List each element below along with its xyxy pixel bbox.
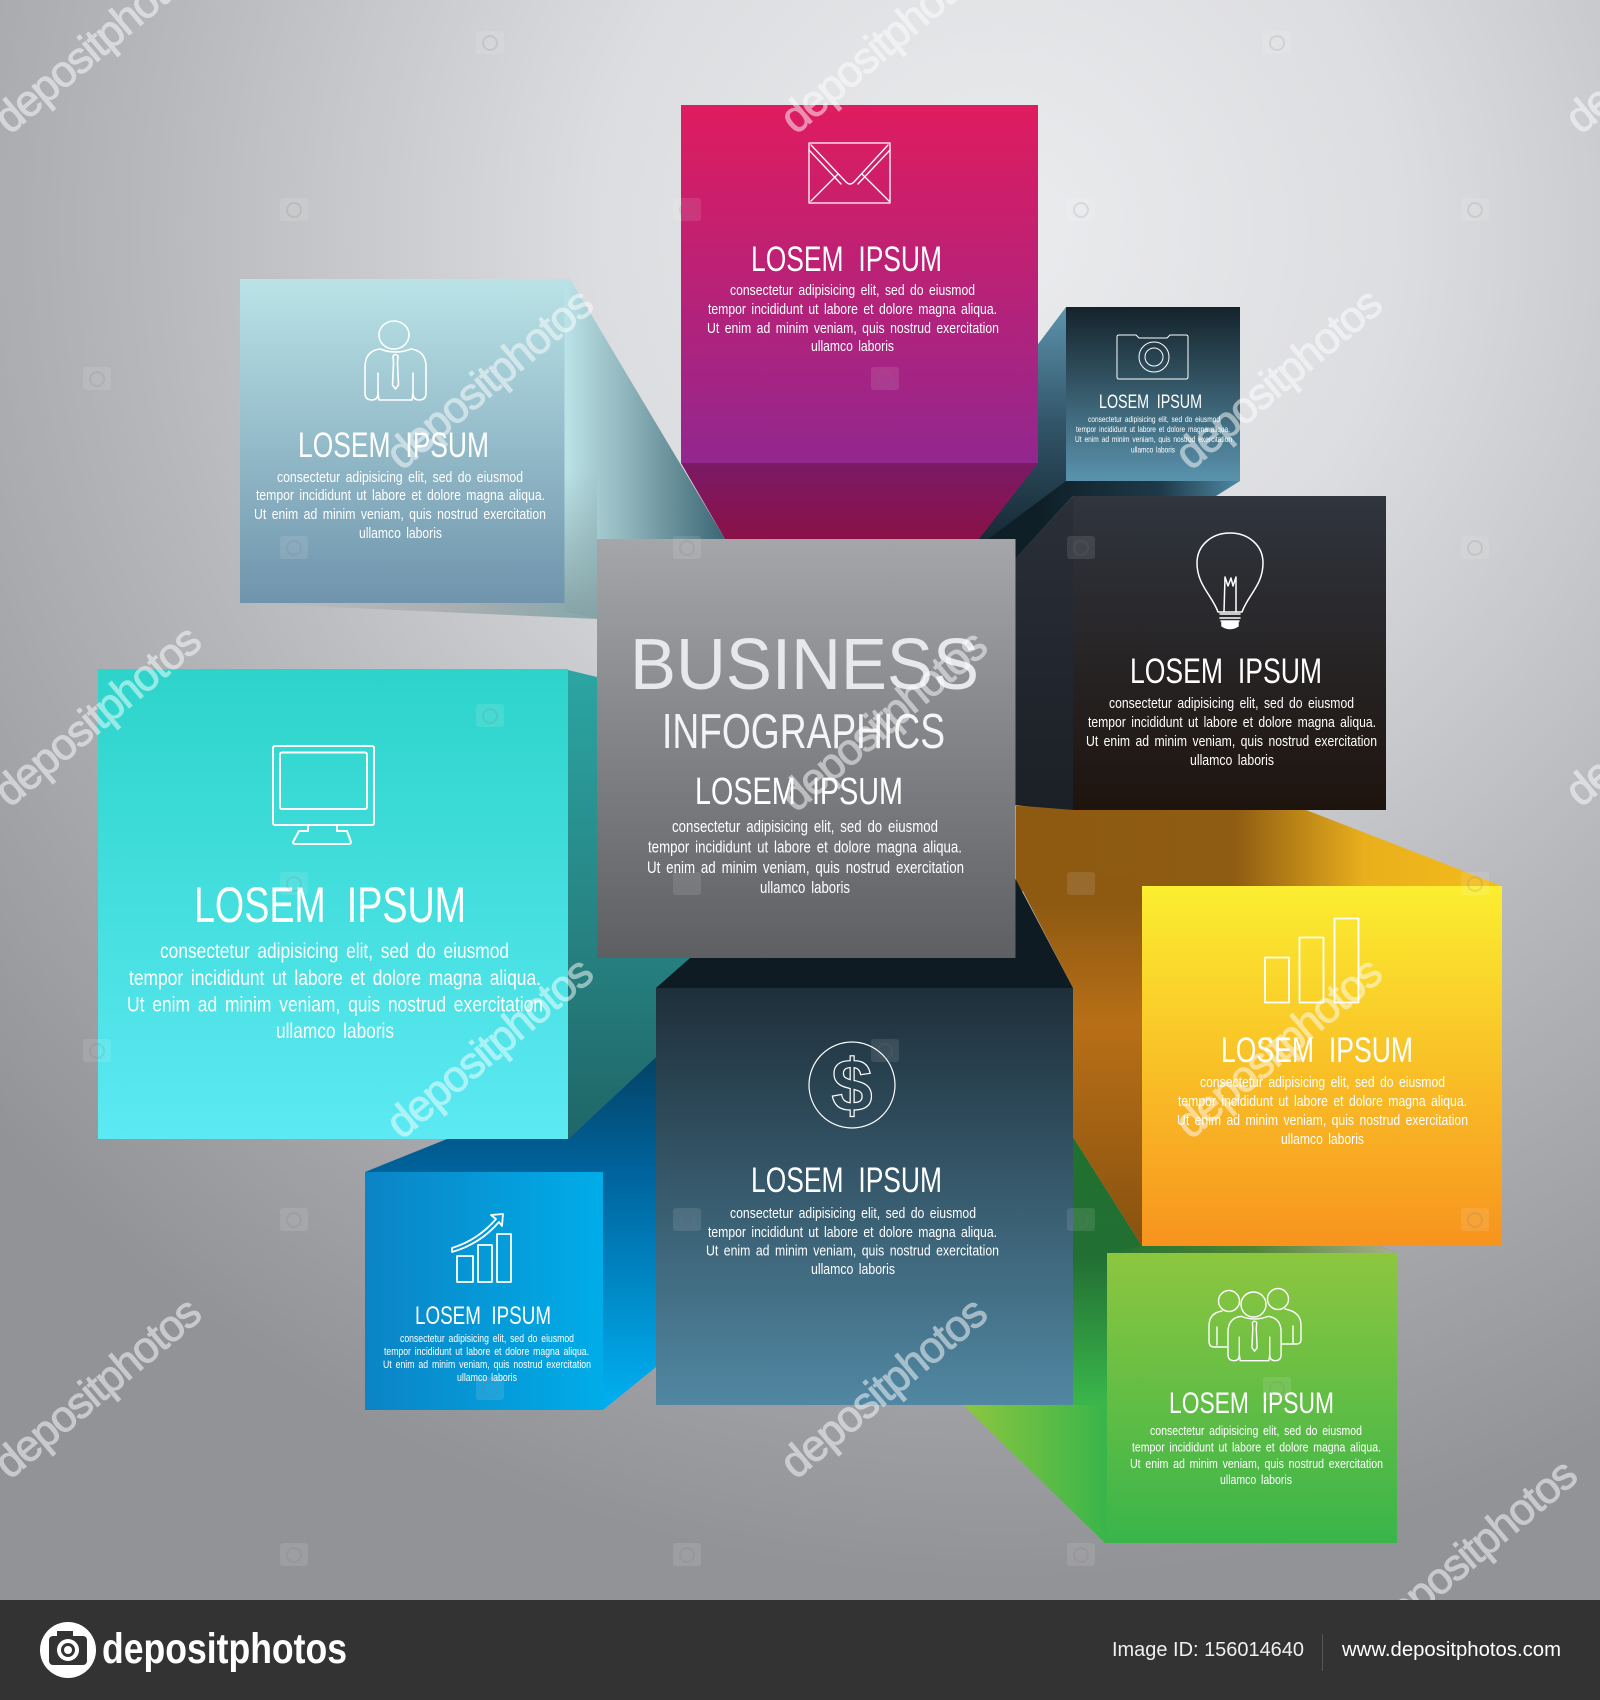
watermark text repeated: depositphotos xyxy=(771,1287,997,1488)
text block: lamp cube: Ut enim ad minim veniam, quis nostrud exercitation xyxy=(1086,733,1377,750)
text block: green cube: Ut enim ad minim veniam, quis nostrud exercitation xyxy=(1130,1456,1383,1471)
text block: slate cube: tempor incididunt ut labore et dolore magna aliqua. xyxy=(708,1224,997,1241)
panel: slate cube xyxy=(656,878,1073,1405)
text block: slate cube: Ut enim ad minim veniam, quis nostrud exercitation xyxy=(706,1242,999,1260)
lamp cube front face xyxy=(1073,496,1386,810)
panel: pale blue cube front xyxy=(240,279,564,603)
heading: center cube: LOSEM IPSUM xyxy=(695,771,903,813)
text block: yellow cube: tempor incididunt ut labore et dolore magna aliqua. xyxy=(1178,1093,1467,1110)
footer bar xyxy=(0,1600,1600,1700)
panel: center grey cube xyxy=(597,539,1016,958)
footer brand name: depositphotos xyxy=(102,1625,347,1673)
text block: pale blue: ullamco laboris xyxy=(359,525,442,542)
text block: pale blue xyxy=(254,469,546,542)
icon: dollar coin: $ xyxy=(831,1044,873,1127)
text block: lamp cube: tempor incididunt ut labore et dolore magna aliqua. xyxy=(1088,714,1376,731)
heading: camera cube: LOSEM IPSUM xyxy=(1099,392,1202,413)
text block: green cube xyxy=(1130,1423,1383,1487)
text block: blue cube: Ut enim ad minim veniam, quis nostrud exercitation xyxy=(383,1359,591,1371)
panel: blue cube front xyxy=(365,1172,603,1410)
icon: camera xyxy=(1117,335,1188,379)
slate cube top face xyxy=(656,878,1073,988)
watermark text repeated: depositphotos xyxy=(377,278,603,479)
heading: blue cube: LOSEM IPSUM xyxy=(415,1302,551,1330)
text block: green cube: consectetur adipisicing elit, sed do eiusmod xyxy=(1150,1423,1362,1438)
slate cube front face xyxy=(656,988,1073,1405)
text block: blue cube xyxy=(383,1333,591,1384)
icon: monitor xyxy=(273,746,374,844)
footer image id: Image ID: 156014640 xyxy=(1112,1639,1304,1661)
text block: yellow cube xyxy=(1177,1074,1468,1148)
panel: cyan cube side face xyxy=(568,670,690,1139)
lamp cube side face xyxy=(1012,496,1073,810)
text block: pale blue: Ut enim ad minim veniam, quis nostrud exercitation xyxy=(254,506,546,523)
text block: magenta: tempor incididunt ut labore et dolore magna aliqua. xyxy=(708,301,997,318)
text block: yellow cube: consectetur adipisicing elit, sed do eiusmod xyxy=(1200,1074,1445,1091)
text block: center cube: consectetur adipisicing elit, sed do eiusmod xyxy=(672,818,938,836)
panel: green cube extrusion xyxy=(963,1137,1397,1543)
text block: slate cube: ullamco laboris xyxy=(811,1261,895,1278)
heading: slate cube: LOSEM IPSUM xyxy=(751,1161,942,1200)
text block: camera cube xyxy=(1075,414,1232,454)
text block: magenta: ullamco laboris xyxy=(811,338,894,355)
text block: magenta: Ut enim ad minim veniam, quis nostrud exercitation xyxy=(707,320,999,337)
text block: lamp cube: ullamco laboris xyxy=(1190,752,1274,769)
icon: light bulb xyxy=(1197,533,1263,628)
text block: cyan cube: Ut enim ad minim veniam, quis nostrud exercitation xyxy=(127,994,543,1016)
footer url: www.depositphotos.com xyxy=(1341,1639,1561,1661)
panel: pale blue cube shadow faces xyxy=(240,279,725,619)
panel: yellow cube extrusion xyxy=(1016,806,1502,1246)
text block: blue cube: ullamco laboris xyxy=(457,1372,517,1384)
icon: team of three people xyxy=(1209,1288,1301,1361)
text block: camera cube: ullamco laboris xyxy=(1131,444,1175,454)
text block: yellow cube: Ut enim ad minim veniam, quis nostrud exercitation xyxy=(1177,1112,1468,1129)
text block: center cube: ullamco laboris xyxy=(760,879,850,897)
heading: lamp cube: LOSEM IPSUM xyxy=(1130,652,1322,691)
panel: yellow cube front xyxy=(1142,886,1502,1246)
watermark text repeated: depositphotos xyxy=(1166,278,1392,479)
text block: center cube xyxy=(647,818,964,897)
icon: footer logo camera xyxy=(40,1622,96,1678)
text block: camera cube: tempor incididunt ut labore et dolore magna aliqua. xyxy=(1076,424,1230,434)
text block: yellow cube: ullamco laboris xyxy=(1281,1131,1364,1148)
panel: magenta cube xyxy=(681,105,1038,539)
text block: blue cube: consectetur adipisicing elit, sed do eiusmod xyxy=(400,1333,574,1345)
panel: green cube front xyxy=(1107,1253,1397,1543)
heading: yellow cube: LOSEM IPSUM xyxy=(1221,1031,1413,1070)
text block: cyan cube xyxy=(127,940,543,1043)
text block: pale blue: consectetur adipisicing elit, sed do eiusmod xyxy=(277,469,523,486)
text block: pale blue: tempor incididunt ut labore et dolore magna aliqua. xyxy=(256,487,545,504)
icon: person with tie xyxy=(365,321,426,400)
panel: camera cube side faces xyxy=(975,307,1240,560)
text block: center cube: Ut enim ad minim veniam, quis nostrud exercitation xyxy=(647,859,964,877)
magenta underside face xyxy=(681,463,1038,539)
heading: cyan cube: LOSEM IPSUM xyxy=(194,877,466,933)
watermark text repeated: depositphotos xyxy=(377,947,603,1148)
panel: camera cube front xyxy=(1066,307,1240,481)
heading: green cube: LOSEM IPSUM xyxy=(1169,1387,1334,1420)
text block: center cube: tempor incididunt ut labore et dolore magna aliqua. xyxy=(648,838,962,856)
text block: lamp cube: consectetur adipisicing elit, sed do eiusmod xyxy=(1109,695,1354,712)
text block: camera cube: Ut enim ad minim veniam, quis nostrud exercitation xyxy=(1075,434,1232,444)
icon: growth chart with arrow xyxy=(452,1214,511,1282)
watermark camera marks xyxy=(83,31,1489,1566)
panel: dark lamp cube xyxy=(1012,496,1386,810)
watermark text repeated: depositphotos xyxy=(1166,947,1392,1148)
title: BUSINESS: BUSINESS xyxy=(630,625,979,705)
watermark text repeated: depositphotos xyxy=(1361,1449,1587,1650)
text block: lamp cube xyxy=(1086,695,1377,769)
text block: magenta xyxy=(707,282,999,355)
footer divider xyxy=(1322,1634,1323,1671)
icon: dollar coin xyxy=(809,1042,895,1128)
text block: green cube: tempor incididunt ut labore et dolore magna aliqua. xyxy=(1132,1440,1381,1454)
text block: green cube: ullamco laboris xyxy=(1220,1472,1292,1487)
text block: cyan cube: consectetur adipisicing elit, sed do eiusmod xyxy=(160,940,509,963)
text block: magenta: consectetur adipisicing elit, sed do eiusmod xyxy=(730,282,975,299)
magenta front face xyxy=(681,105,1038,463)
text block: blue cube: tempor incididunt ut labore et dolore magna aliqua. xyxy=(384,1346,589,1358)
heading: pale blue: LOSEM IPSUM xyxy=(298,426,489,465)
icon: bar chart xyxy=(1265,918,1358,1002)
icon: envelope xyxy=(809,143,890,203)
text block: camera cube: consectetur adipisicing elit, sed do eiusmod xyxy=(1088,414,1220,424)
text block: cyan cube: tempor incididunt ut labore et dolore magna aliqua. xyxy=(129,967,541,990)
panel: blue cube extrusion xyxy=(365,1057,656,1410)
subtitle: INFOGRAPHICS: INFOGRAPHICS xyxy=(662,705,945,759)
text block: slate cube xyxy=(706,1205,999,1278)
heading: magenta: LOSEM IPSUM xyxy=(751,240,942,279)
watermark text repeated: depositphotos xyxy=(771,620,997,821)
text block: slate cube: consectetur adipisicing elit, sed do eiusmod xyxy=(730,1205,976,1222)
panel: cyan cube front xyxy=(98,669,568,1139)
text block: cyan cube: ullamco laboris xyxy=(276,1020,394,1043)
